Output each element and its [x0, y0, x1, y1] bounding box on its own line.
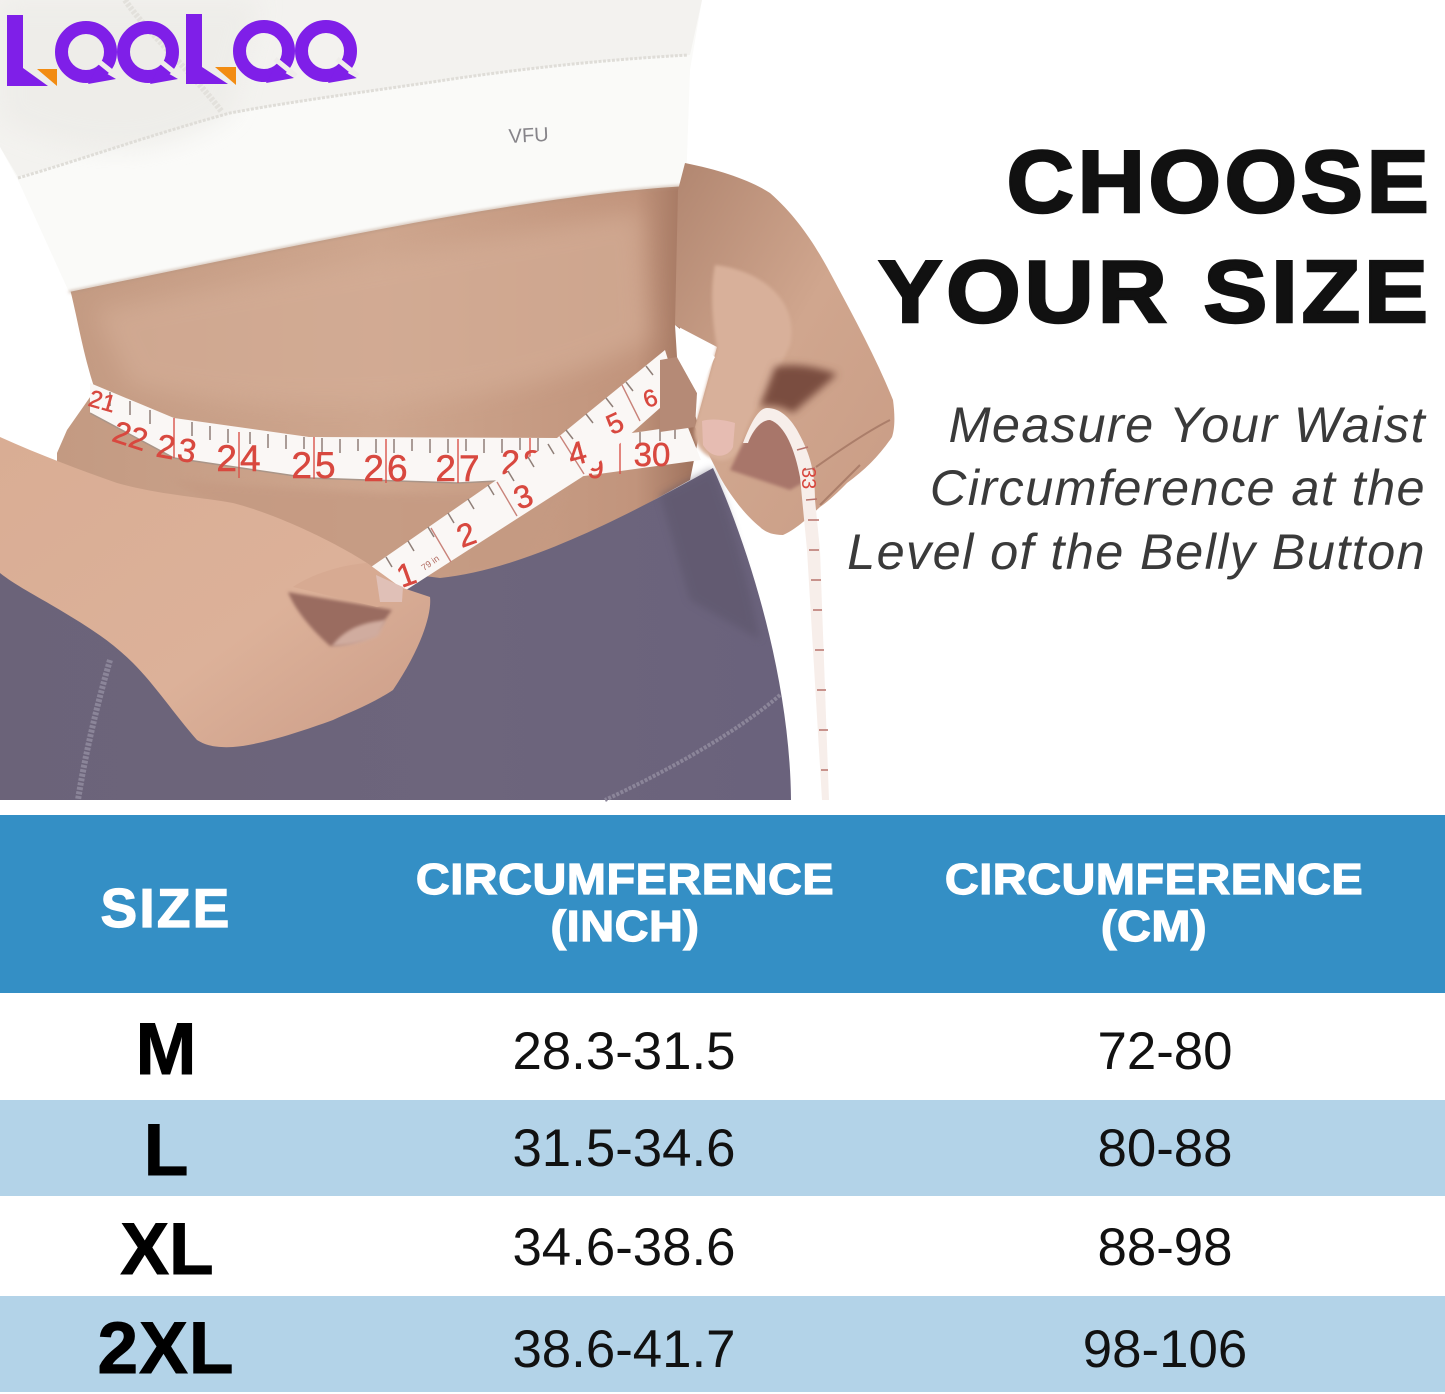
hand left	[0, 437, 430, 747]
tape diagonal: 6	[640, 384, 661, 414]
tape hanging	[743, 408, 829, 800]
subtitle text: Circumference at the	[930, 459, 1426, 516]
hand right	[660, 163, 894, 535]
tape horizontal: 23	[154, 427, 202, 471]
tape horizontal: 21	[86, 385, 119, 418]
leggings	[0, 468, 791, 800]
subtitle text: Measure Your Waist	[948, 396, 1426, 453]
header: inch: (INCH)	[551, 902, 699, 951]
inch L: 31.5-34.6	[512, 1119, 736, 1178]
tape horizontal	[86, 383, 701, 489]
size XL: XL	[120, 1209, 214, 1290]
tape hanging: 33	[797, 467, 819, 489]
tape horizontal: 9	[587, 452, 607, 485]
size L: L	[144, 1110, 188, 1191]
tape diagonal	[371, 350, 678, 595]
tape diagonal: 4	[564, 434, 590, 473]
title: CHOOSE	[1006, 132, 1432, 231]
tape horizontal: 22	[108, 414, 152, 458]
subtitle text	[847, 396, 1426, 580]
tape diagonal: 1	[392, 555, 421, 595]
header: cm: (CM)	[1101, 902, 1207, 951]
logo	[7, 14, 358, 86]
leggings shadow	[660, 468, 760, 640]
size 2XL: 2XL	[98, 1308, 234, 1389]
leggings seams	[78, 660, 110, 800]
tape diagonal: 3	[509, 477, 538, 517]
title	[878, 132, 1432, 341]
header: inch: CIRCUMFERENCE	[416, 855, 834, 904]
top brand mark: VFU	[508, 124, 549, 148]
tape horizontal: 27	[435, 448, 483, 489]
tape horizontal: 30	[634, 436, 670, 473]
tape horizontal: 24	[216, 438, 264, 479]
row 2XL	[0, 1296, 1445, 1392]
photo: woman measuring waist with tape	[0, 0, 894, 802]
header: inch	[416, 855, 834, 951]
gap between arm and waist	[675, 325, 715, 393]
title: YOUR SIZE	[879, 242, 1432, 341]
header: size: SIZE	[100, 877, 232, 939]
cm M: 72-80	[1097, 1022, 1233, 1081]
table header band	[0, 815, 1445, 993]
tape diagonal: 79 in	[419, 553, 441, 573]
inch XL: 34.6-38.6	[512, 1218, 736, 1277]
inch M: 28.3-31.5	[512, 1022, 736, 1081]
white crop top	[0, 0, 702, 292]
subtitle text: Level of the Belly Button	[847, 523, 1426, 580]
cm XL: 88-98	[1097, 1218, 1233, 1277]
tape horizontal: 26	[363, 448, 411, 489]
inch 2XL: 38.6-41.7	[512, 1320, 736, 1379]
size M: M	[136, 1009, 196, 1090]
row L	[0, 1100, 1445, 1196]
tape diagonal: 5	[601, 406, 629, 441]
tape horizontal: 28	[501, 444, 545, 482]
tape diagonal: 2	[452, 515, 481, 555]
header: cm	[945, 855, 1363, 951]
cm L: 80-88	[1097, 1119, 1233, 1178]
header: cm: CIRCUMFERENCE	[945, 855, 1363, 904]
cm 2XL: 98-106	[1083, 1320, 1247, 1379]
torso skin	[57, 140, 700, 590]
row XL	[0, 1196, 1445, 1296]
row M	[0, 993, 1445, 1100]
tape horizontal: 25	[291, 445, 339, 486]
